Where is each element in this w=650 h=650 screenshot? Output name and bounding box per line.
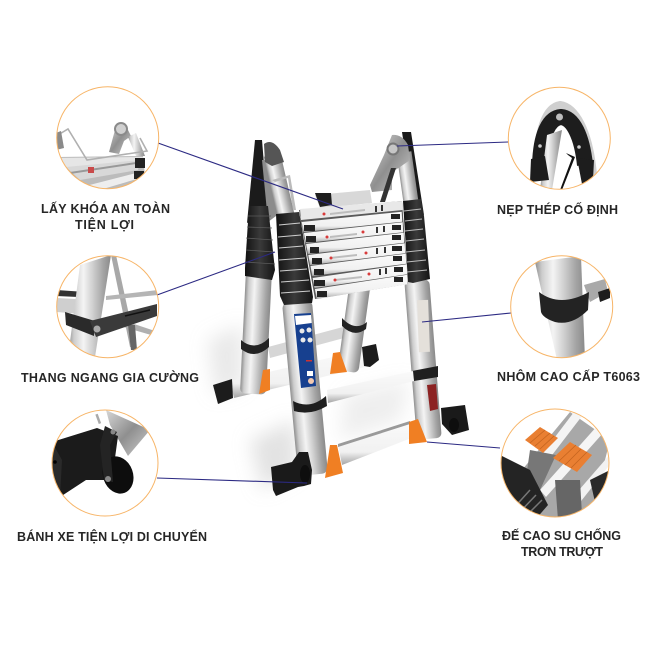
front-right upper tube, hinge, strap	[370, 132, 424, 215]
photo: rolling wheel	[50, 410, 150, 498]
back-left upper section	[245, 140, 280, 280]
photo: lock hinge	[57, 122, 148, 188]
leader lines	[157, 142, 511, 483]
back-left leg	[240, 269, 272, 395]
back-right leg	[330, 282, 371, 374]
heading: crossbar: THANG NGANG GIA CƯỜNG	[21, 370, 199, 385]
photo: T6063 aluminium tube	[535, 256, 610, 360]
heading: rubber pad: TRƠN TRƯỢT	[521, 545, 603, 559]
ladder: aluminium A-frame	[213, 132, 469, 496]
telescopic collars right	[403, 199, 430, 283]
back-right foot and rung	[213, 327, 379, 404]
front-right lower leg	[404, 279, 442, 440]
callout: rubber pad circle	[500, 409, 612, 520]
telescopic collars left	[276, 212, 313, 305]
ladder: floor shadows	[208, 325, 410, 490]
heading: aluminium: NHÔM CAO CẤP T6063	[497, 369, 640, 384]
heading: wheel: BÁNH XE TIỆN LỢI DI CHUYỂN	[17, 529, 207, 544]
callout: aluminium circle	[511, 256, 613, 360]
callout: steel brace circle	[508, 87, 610, 190]
heading: steel brace: NẸP THÉP CỐ ĐỊNH	[497, 202, 618, 217]
blue sticker	[294, 313, 316, 388]
heading: rubber pad: ĐẾ CAO SU CHỐNG	[502, 528, 621, 543]
front-left lower leg	[282, 300, 328, 476]
callout: crossbar circle	[56, 255, 159, 358]
orange rubber pads	[325, 419, 427, 478]
callout: safety lock circle	[55, 87, 159, 197]
heading: safety lock: LẤY KHÓA AN TOÀN	[41, 201, 170, 216]
heading: rubber pad	[502, 528, 621, 559]
front lower rungs	[327, 371, 414, 465]
front-left upper tube and hinge	[264, 142, 296, 217]
photo: reinforced crossbar	[56, 255, 158, 357]
photo: steel hinge plate	[530, 106, 594, 190]
rung panel	[299, 201, 408, 299]
callout: wheel circle	[50, 410, 158, 516]
top back rung and strap	[315, 190, 372, 208]
photo: anti-slip rubber pads	[500, 412, 612, 520]
rolling feet	[271, 405, 469, 496]
heading: safety lock	[41, 201, 170, 232]
heading: safety lock: TIỆN LỢI	[75, 217, 134, 232]
